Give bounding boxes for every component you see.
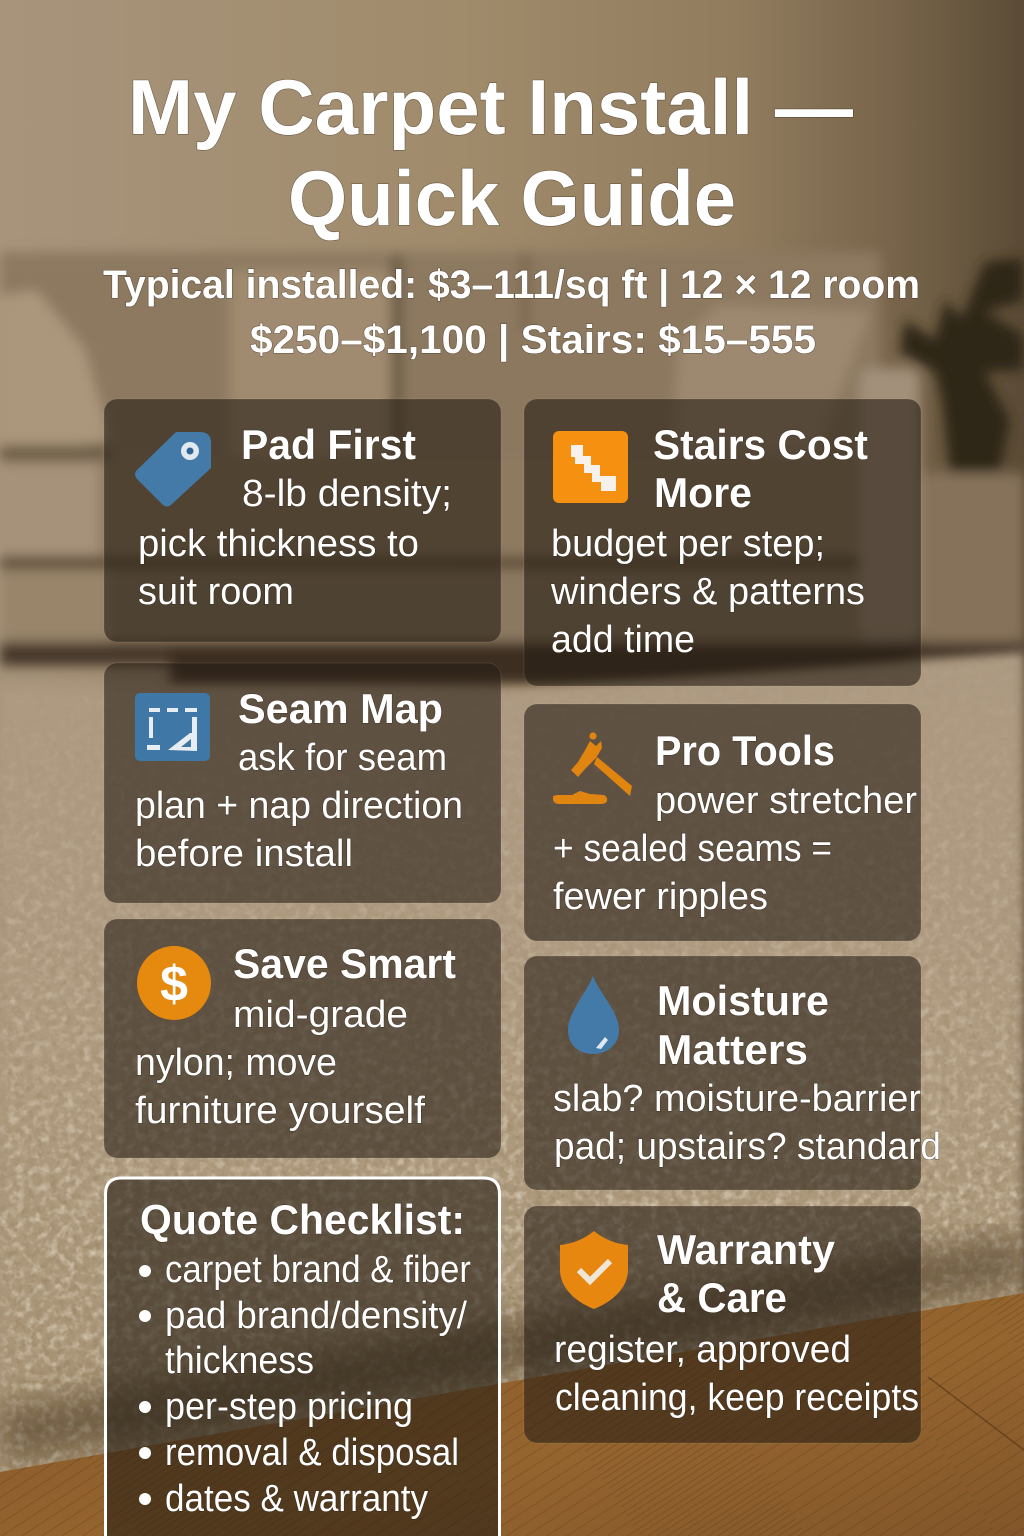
text: stairs details: add time bbox=[551, 619, 695, 661]
panel: stairs cost more bbox=[524, 399, 921, 686]
title bbox=[128, 63, 853, 242]
heading: warranty and care bbox=[657, 1226, 836, 1321]
panel: quote checklist bbox=[106, 1178, 500, 1536]
heading: warranty and care: & Care bbox=[657, 1274, 787, 1321]
panel: moisture matters bbox=[524, 956, 941, 1190]
heading: pad first: Pad First bbox=[241, 421, 416, 468]
text: stairs details: budget per step; bbox=[551, 523, 825, 565]
text: pad first details: pick thickness to bbox=[138, 523, 419, 565]
text: stairs details bbox=[550, 523, 865, 661]
text: pro tools details bbox=[553, 780, 917, 918]
heading: stairs cost more: Stairs Cost bbox=[653, 421, 868, 468]
panel: warranty and care bbox=[524, 1206, 921, 1443]
list: checklist items: thickness bbox=[165, 1340, 314, 1382]
heading: moisture matters bbox=[657, 977, 829, 1073]
list: checklist items: removal & disposal bbox=[165, 1432, 459, 1474]
panel: pad first bbox=[104, 399, 501, 642]
text: stairs details: winders & patterns bbox=[550, 571, 865, 613]
carpet bbox=[0, 640, 1024, 1536]
text: warranty details: register, approved bbox=[554, 1329, 851, 1371]
list: checklist items: dates & warranty bbox=[165, 1478, 428, 1520]
heading: seam map: Seam Map bbox=[238, 685, 443, 732]
text: seam map details: ask for seam bbox=[238, 737, 447, 779]
subtitle: typical prices: Typical installed: $3–111/sq ft | 12 × 12 room bbox=[103, 263, 920, 307]
list: checklist items bbox=[139, 1249, 471, 1520]
panel: save smart bbox=[104, 919, 501, 1158]
list: checklist items: per-step pricing bbox=[165, 1386, 413, 1428]
text: moisture details: slab? moisture-barrier bbox=[553, 1078, 921, 1120]
heading: quote checklist: Quote Checklist: bbox=[140, 1196, 465, 1243]
panel: seam map bbox=[104, 663, 501, 903]
icon: gavel bbox=[553, 732, 632, 804]
text: seam map details: before install bbox=[135, 833, 353, 875]
text: moisture details: pad; upstairs? standard bbox=[554, 1126, 941, 1168]
text: save smart details: furniture yourself bbox=[135, 1090, 425, 1132]
title: Quick Guide bbox=[288, 154, 736, 242]
text: save smart details: nylon; move bbox=[135, 1042, 337, 1084]
icon: stairs bbox=[553, 431, 628, 503]
icon: seam plan bbox=[135, 693, 210, 761]
subtitle: typical prices bbox=[103, 263, 920, 362]
heading: pro tools: Pro Tools bbox=[655, 727, 835, 774]
wood floor bbox=[0, 1280, 1024, 1536]
icon: water drop bbox=[568, 976, 619, 1054]
text: save smart details bbox=[135, 994, 425, 1132]
list: checklist items: pad brand/density/ bbox=[165, 1295, 467, 1337]
icon: dollar coin: $ bbox=[160, 956, 188, 1012]
heading: warranty and care: Warranty bbox=[657, 1226, 836, 1273]
text: pad first details bbox=[138, 473, 452, 613]
text: pro tools details: power stretcher bbox=[655, 780, 917, 822]
heading: moisture matters: Moisture bbox=[657, 977, 829, 1024]
heading: stairs cost more bbox=[653, 421, 868, 516]
icon: dollar coin bbox=[137, 946, 211, 1020]
text: moisture details bbox=[553, 1078, 941, 1168]
text: pro tools details: fewer ripples bbox=[553, 876, 768, 918]
list: checklist items: carpet brand & fiber bbox=[165, 1249, 471, 1291]
icon: shield check bbox=[560, 1231, 628, 1309]
heading: moisture matters: Matters bbox=[657, 1026, 808, 1073]
text: warranty details: cleaning, keep receipts bbox=[555, 1377, 919, 1419]
text: pad first details: 8-lb density; bbox=[242, 473, 452, 515]
icon: price tag bbox=[135, 432, 211, 506]
text: seam map details bbox=[135, 737, 463, 875]
subtitle: typical prices: $250–$1,100 | Stairs: $15–555 bbox=[250, 318, 816, 362]
text: warranty details bbox=[554, 1329, 919, 1419]
heading: save smart: Save Smart bbox=[233, 940, 456, 987]
text: save smart details: mid-grade bbox=[233, 994, 408, 1036]
panel: pro tools bbox=[524, 704, 921, 941]
text: seam map details: plan + nap direction bbox=[135, 785, 463, 827]
text: pro tools details: + sealed seams = bbox=[553, 828, 832, 870]
title: My Carpet Install — bbox=[128, 63, 853, 151]
heading: stairs cost more: More bbox=[654, 469, 752, 516]
text: pad first details: suit room bbox=[138, 571, 294, 613]
